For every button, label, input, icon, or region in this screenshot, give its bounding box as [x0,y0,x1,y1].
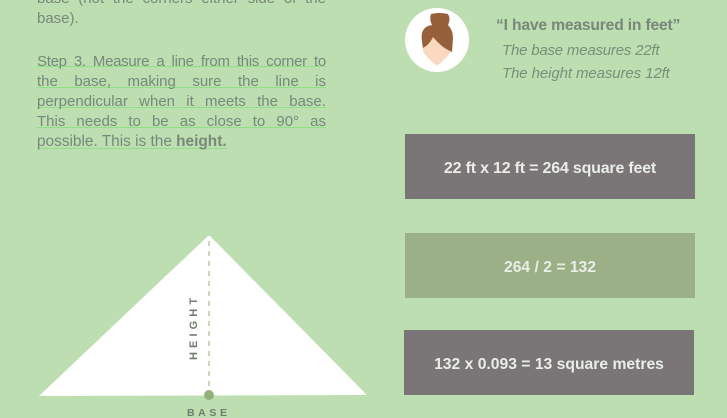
text block: step 3 instructions: this [237,53,259,70]
triangle diagram [39,236,367,418]
base measurement text: The base measures 22ft [502,42,659,59]
text block: step 3 instructions: close [207,113,242,130]
text block: step 3 instructions: from [201,53,230,70]
triangle shape [39,236,367,396]
text block: step 3 instructions: to [128,113,141,130]
calculation box: halved [405,233,695,298]
text block: step 3 instructions: be [152,113,169,130]
height label: HEIGHT [188,294,200,360]
text block: step 3 instructions: needs [76,113,117,130]
text block: step 3 instructions: to [253,113,265,130]
avatar background [405,8,469,72]
text block: step 3 instructions: possible. This is the height. [37,133,227,150]
text block: step 3 instructions: it [186,93,194,110]
text block: step 3 instructions: a [156,53,164,70]
text block: step 3 instructions: making [128,73,176,90]
text block: step 3 instructions: perpendicular [37,93,128,110]
text block: step 3 instructions: line [172,53,194,70]
text block: step 3 instructions: the [238,73,259,90]
text block: step 3 instructions: Measure [93,53,149,70]
text block: step 3 instructions: This [37,113,65,130]
text block: step 3 instructions: meets [205,93,246,110]
base point marker [204,390,214,400]
calculation box: halved: 264 / 2 = 132 [504,259,596,276]
text block: step 3 instructions: the [37,73,58,90]
hair [422,13,453,52]
text block: step 3 instructions: to [314,53,326,70]
text block: step 3 instructions: as [180,113,196,130]
text block: step 3 instructions: Step [37,53,67,70]
calculation box: area in square feet [405,134,695,199]
text block: step 3 instructions: when [139,93,175,110]
text block: step 3 instructions: sure [192,73,222,90]
text block: step 3 instructions [37,53,326,150]
calculation box: square metres: 132 x 0.093 = 13 square metres [434,356,664,373]
text block: step 3 instructions: line [275,73,299,90]
icon: woman avatar [405,8,469,72]
text block: step 2 ending: base). [37,10,79,27]
text block: step 3 instructions: 3. [74,53,86,70]
text block: step 3 instructions: as [310,113,326,130]
calculation box: square metres [404,330,694,395]
text block: step 3 instructions: the [257,93,278,110]
text block: step 3 instructions: corner [266,53,307,70]
height measurement text: The height measures 12ft [502,65,670,82]
text block: step 2 ending [37,0,326,27]
text block: step 3 instructions: base. [289,93,326,110]
height dashed line [208,241,210,390]
text block: step 3 instructions: base, [74,73,111,90]
calculation box: area in square feet: 22 ft x 12 ft = 264 square feet [444,160,656,177]
quote heading: “I have measured in feet” [496,17,680,34]
text block: step 3 instructions: 90° [276,113,299,130]
face [423,30,451,66]
text block: step 3 instructions: is [315,73,326,90]
